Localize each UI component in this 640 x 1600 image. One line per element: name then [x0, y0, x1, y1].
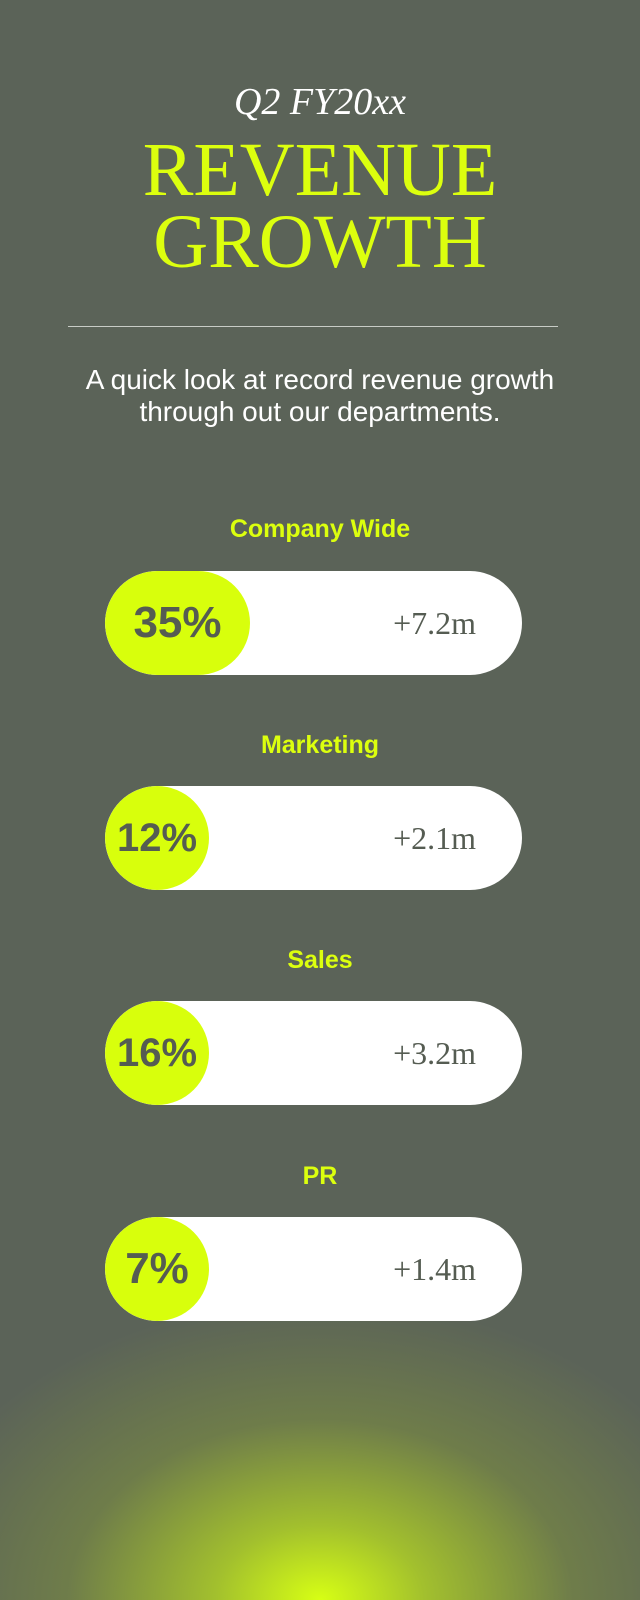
bar: Sales — [105, 1001, 522, 1105]
label: Marketing: Marketing — [261, 731, 379, 759]
title: REVENUE — [143, 128, 497, 212]
bar: PR: +1.4m — [393, 1251, 476, 1287]
subtitle: Q2 FY20xx: Q2 FY20xx — [234, 81, 406, 123]
intro text: A quick look at record revenue growth — [86, 364, 554, 395]
label: Sales: Sales — [287, 946, 353, 974]
bar: Company Wide: +7.2m — [393, 605, 476, 641]
label: Company Wide: Company Wide — [230, 515, 410, 543]
bar: Company Wide — [105, 571, 522, 675]
bar: PR: 7% — [125, 1244, 189, 1293]
intro text: through out our departments. — [139, 396, 501, 427]
label: PR: PR — [303, 1162, 337, 1190]
bar: Marketing: 12% — [117, 816, 197, 860]
bar: Marketing — [105, 786, 522, 890]
bar: Marketing: +2.1m — [393, 820, 476, 856]
intro text — [86, 364, 554, 427]
title: GROWTH — [153, 200, 487, 284]
title — [143, 128, 497, 284]
bar: Company Wide: 35% — [133, 598, 222, 647]
bar: Sales: 16% — [117, 1031, 197, 1075]
bar: PR — [105, 1217, 522, 1321]
bar: Sales: +3.2m — [393, 1035, 476, 1071]
